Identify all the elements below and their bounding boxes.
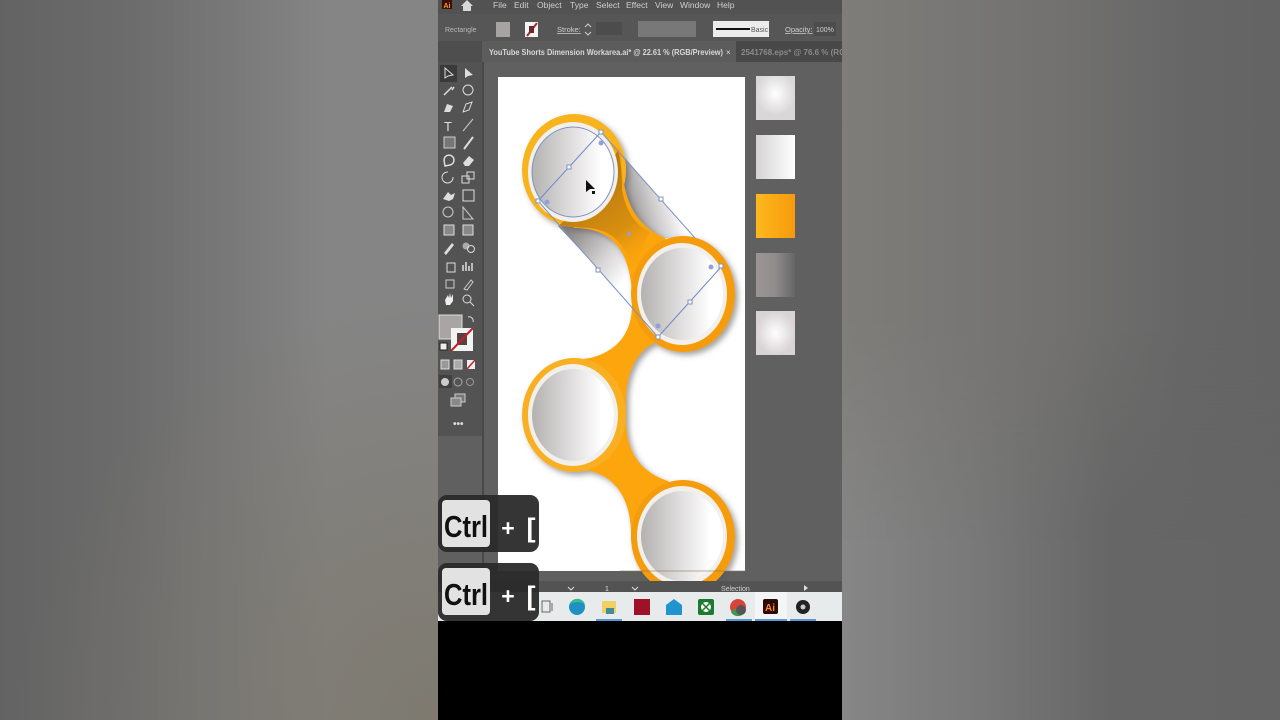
control bar: Rectangle	[445, 27, 477, 34]
menu bar: Object	[537, 0, 562, 10]
status bar: 1	[605, 586, 609, 593]
swatch: light radial	[756, 76, 795, 120]
menu bar: Window	[680, 0, 711, 10]
menu bar: Help	[717, 0, 735, 10]
menu bar: Effect	[626, 0, 648, 10]
artboard	[498, 77, 745, 571]
orange chain graphic	[522, 114, 745, 594]
status bar	[484, 581, 842, 593]
menu bar: Type	[570, 0, 589, 10]
orange shape	[522, 114, 735, 594]
menu bar	[438, 0, 842, 14]
disc 3	[528, 364, 618, 466]
shortcut badge 1	[438, 495, 539, 552]
control bar	[438, 14, 842, 41]
document tabs: YouTube Shorts Dimension Workarea.ai* @ 22.61 % (RGB/Preview)	[489, 48, 723, 57]
menu bar: Edit	[514, 0, 529, 10]
disc 2	[637, 243, 727, 345]
active underlines	[596, 619, 816, 621]
swatch: orange	[756, 194, 795, 238]
status bar: Selection	[721, 586, 750, 593]
shortcut badge 2: [	[526, 581, 536, 611]
black bar below video	[438, 621, 842, 720]
gradient swatches	[756, 76, 795, 355]
tools panel	[438, 62, 484, 592]
menu bar: Ai	[444, 3, 451, 10]
icon: edge	[569, 599, 585, 615]
control bar: Opacity:	[785, 25, 813, 34]
dark shading on connector 1	[558, 150, 650, 252]
disc 4	[637, 486, 727, 586]
swatch: dark gray fade	[756, 253, 795, 297]
blurred background: right side	[842, 0, 1280, 720]
connector 1 to 2	[545, 144, 668, 288]
icon: xbox	[698, 599, 714, 615]
gradient shadow strips	[558, 158, 684, 286]
icon: red app	[634, 599, 650, 615]
shortcut badge 2: +	[501, 583, 515, 609]
shortcut badge 1: [	[526, 513, 536, 543]
document tabs: 2541768.eps* @ 76.6 % (RGB/	[741, 48, 854, 57]
tools panel: T	[444, 119, 452, 134]
shortcut badge 2: Ctrl	[444, 577, 488, 612]
swatch: silver linear	[756, 135, 795, 179]
icon: obs	[796, 600, 810, 614]
icon: mail	[666, 599, 682, 615]
cursor	[586, 180, 595, 194]
document tabs: ×	[726, 48, 731, 57]
selection bounding box	[532, 127, 723, 339]
blurred background: left side	[0, 0, 438, 720]
illustrator workspace background	[438, 0, 842, 592]
control bar: Basic	[751, 27, 769, 34]
shortcut badge 1: Ctrl	[444, 509, 488, 544]
disc 1	[528, 122, 618, 222]
tools panel: •••	[453, 419, 464, 430]
shortcut badge 1: +	[501, 515, 515, 541]
document tabs	[438, 41, 854, 62]
control bar: 100%	[816, 27, 834, 34]
menu bar: View	[655, 0, 674, 10]
menu bar: Select	[596, 0, 620, 10]
shortcut badge 2	[438, 563, 539, 621]
icon: explorer	[602, 601, 616, 614]
menu bar: File	[493, 0, 507, 10]
connector 2 to 3	[582, 306, 660, 415]
windows taskbar	[438, 592, 842, 621]
icon: illustrator	[763, 599, 778, 614]
connector 3 to 4	[586, 416, 672, 540]
icon: chrome	[730, 599, 746, 615]
control bar: Stroke:	[557, 25, 581, 34]
windows taskbar: Ai	[765, 603, 775, 614]
swatch: pale radial	[756, 311, 795, 355]
icon: task view	[542, 601, 552, 612]
